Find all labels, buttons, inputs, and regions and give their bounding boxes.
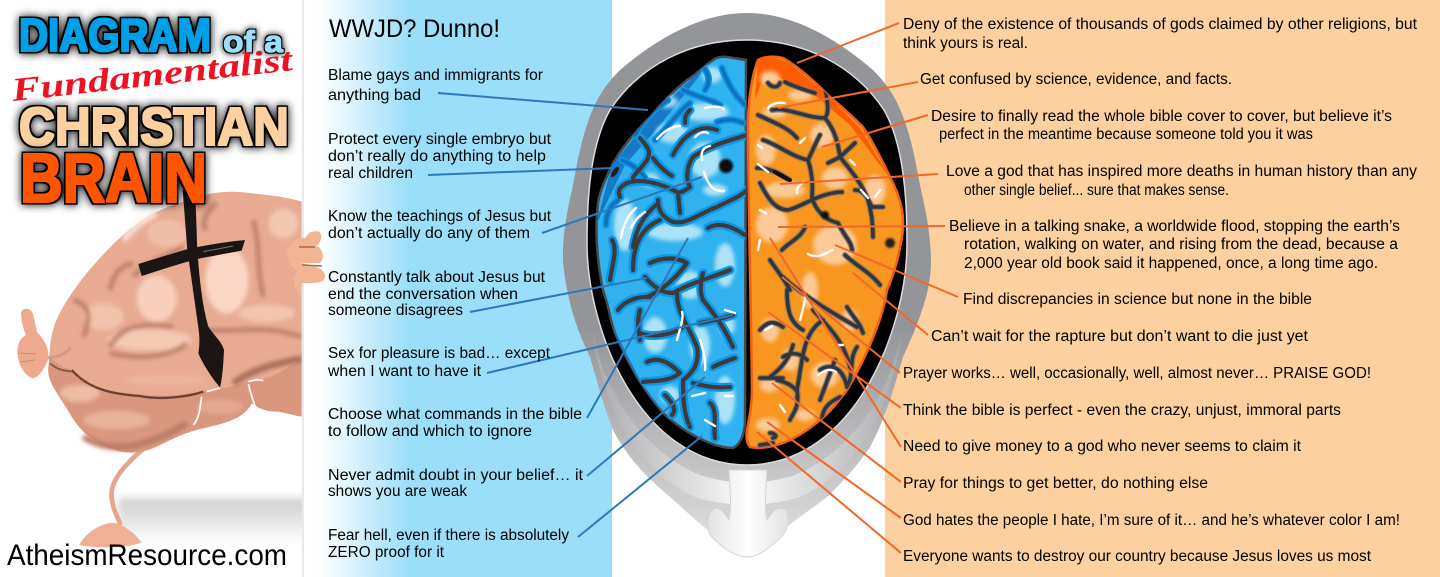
trait: read bible: perfect in the meantime because someone told you it was bbox=[939, 126, 1313, 143]
panel: white left column bbox=[0, 0, 302, 577]
trait: deaths: other single belief... sure that makes sense. bbox=[964, 182, 1229, 199]
blue highlights bbox=[621, 107, 735, 426]
left thumbs-up hand bbox=[17, 309, 48, 378]
trait: perfect bible: Think the bible is perfect - even the crazy, unjust, immoral parts bbox=[903, 402, 1341, 419]
skull base stem bbox=[708, 470, 788, 557]
trait: science: Get confused by science, evidence, and facts. bbox=[920, 71, 1232, 88]
trait: read bible: Desire to finally read the whole bible cover to cover, but believe it’s bbox=[931, 108, 1392, 125]
trait: sex: when I want to have it bbox=[327, 363, 482, 380]
brain lobe folds and highlights bbox=[60, 203, 302, 447]
trait: doubt: Never admit doubt in your belief… it bbox=[328, 467, 584, 484]
trait: deaths bbox=[946, 163, 1417, 199]
panel text: orange column traits bbox=[903, 16, 1418, 565]
website credit: AtheismResource.com bbox=[7, 539, 287, 572]
trait: hell: Fear hell, even if there is absolutely bbox=[328, 527, 569, 544]
orange highlights bbox=[758, 103, 880, 412]
trait: deaths: Love a god that has inspired more deaths in human history than any bbox=[946, 163, 1417, 180]
trait: talking snake: 2,000 year old book said it happened, once, a long time ago. bbox=[964, 255, 1378, 272]
heading: WWJD? Dunno!: WWJD? Dunno! bbox=[329, 15, 500, 43]
trait: talking snake: rotation, walking on water, and rising from the dead, because a bbox=[964, 236, 1398, 253]
trait: discrepancies: Find discrepancies in science but none in the bible bbox=[963, 291, 1312, 308]
trait: gods: Deny of the existence of thousands of gods claimed by other religions, but bbox=[903, 16, 1418, 33]
blue folds dark lines bbox=[610, 110, 747, 438]
trait: doubt bbox=[328, 467, 584, 500]
title: Diagram of a Fundamentalist Christian Brain bbox=[9, 9, 295, 217]
trait: hell: ZERO proof for it bbox=[328, 544, 445, 561]
leader lines: orange column bbox=[757, 23, 958, 553]
trait: embryo: don’t really do anything to help bbox=[328, 148, 546, 165]
trait: commands bbox=[328, 406, 582, 440]
panel text: blue column traits bbox=[327, 15, 584, 561]
right hand gripping divider bbox=[287, 231, 325, 296]
skull cavity bbox=[587, 40, 907, 465]
panel: blue traits column bbox=[304, 0, 612, 577]
trait: commands: Choose what commands in the bible bbox=[328, 406, 582, 423]
blue folds halo bbox=[610, 110, 747, 438]
upper brain body bbox=[50, 192, 302, 396]
illustration: skull and brain top view bbox=[563, 13, 931, 557]
heading word Fundamentalist: Fundamentalist bbox=[9, 42, 295, 109]
trait: money: Need to give money to a god who never seems to claim it bbox=[903, 438, 1302, 455]
trait: read bible bbox=[931, 108, 1392, 143]
trait: embryo: Protect every single embryo but bbox=[328, 131, 552, 148]
ground shadow bbox=[118, 498, 308, 544]
trait: blame: anything bad bbox=[328, 87, 421, 104]
illustration: cartoon brain mascot bbox=[17, 190, 325, 547]
trait: gods bbox=[903, 16, 1418, 52]
panel: orange traits column bbox=[885, 0, 1440, 577]
heading word CHRISTIAN: CHRISTIAN bbox=[19, 97, 289, 157]
heading word BRAIN: BRAIN bbox=[20, 139, 207, 217]
trait: teachings bbox=[328, 208, 552, 242]
trait: sex: Sex for pleasure is bad… except bbox=[328, 345, 551, 362]
trait: talking snake: Believe in a talking snake, a worldwide flood, stopping the earth’s bbox=[949, 218, 1400, 235]
trait: rapture: Can’t wait for the rapture but don’t want to die just yet bbox=[931, 328, 1309, 345]
trait: gods: think yours is real. bbox=[903, 35, 1028, 52]
trait: talk: end the conversation when bbox=[328, 286, 518, 303]
orange folds gray halo bbox=[757, 82, 883, 445]
trait: talking snake bbox=[949, 218, 1400, 272]
lower brain lobe bbox=[48, 350, 302, 453]
trait: talk: Constantly talk about Jesus but bbox=[328, 269, 546, 286]
skull outer shape bbox=[563, 13, 931, 557]
trait: country: Everyone wants to destroy our country because Jesus loves us most bbox=[903, 548, 1372, 565]
trait: pray: Pray for things to get better, do nothing else bbox=[903, 475, 1208, 492]
brain right hemisphere, orange bbox=[746, 57, 903, 448]
leader lines: blue column bbox=[428, 93, 733, 537]
trait: doubt: shows you are weak bbox=[328, 483, 467, 500]
trait: commands: to follow and which to ignore bbox=[328, 423, 532, 440]
orange folds dark lines bbox=[757, 82, 883, 445]
trait: teachings: Know the teachings of Jesus but bbox=[328, 208, 552, 225]
trait: embryo: real children bbox=[328, 165, 413, 182]
heading words of a: of a bbox=[223, 24, 284, 59]
trait: hates: God hates the people I hate, I’m sure of it… and he’s whatever color I am! bbox=[903, 512, 1400, 529]
trait: blame: Blame gays and immigrants for bbox=[328, 67, 543, 84]
trait: prayer: Prayer works… well, occasionally, well, almost never… PRAISE GOD! bbox=[903, 365, 1371, 382]
brain left hemisphere, blue bbox=[596, 57, 747, 448]
trait: sex bbox=[327, 345, 551, 380]
trait: hell bbox=[328, 527, 569, 561]
trait: embryo bbox=[328, 131, 552, 182]
skull lower rim band bbox=[592, 330, 902, 504]
trait: blame bbox=[328, 67, 543, 104]
black cross bbox=[183, 190, 224, 387]
trait: talk bbox=[328, 269, 546, 319]
heading word DIAGRAM: DIAGRAM bbox=[19, 9, 211, 61]
trait: talk: someone disagrees bbox=[328, 302, 463, 319]
tail stem and foot bbox=[112, 448, 144, 525]
trait: teachings: don’t actually do any of them bbox=[328, 225, 530, 242]
